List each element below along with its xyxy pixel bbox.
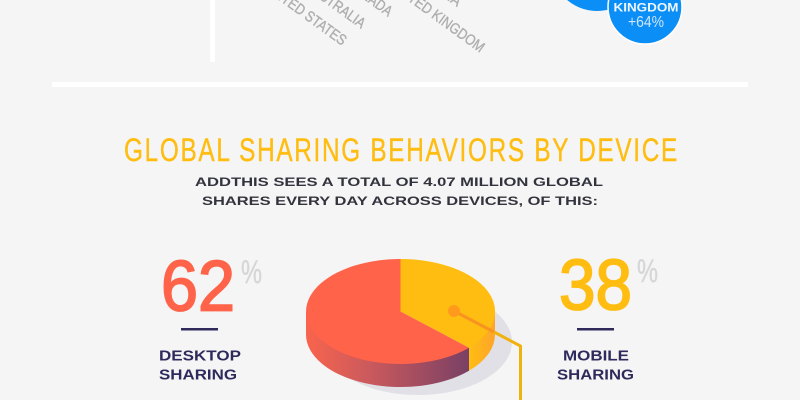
title: GLOBAL SHARING BEHAVIORS BY DEVICE <box>124 133 677 169</box>
bubble value: +64% <box>628 14 664 31</box>
pie top: mobile slice <box>400 259 495 348</box>
desktop label: DESKTOP <box>159 348 241 364</box>
desktop label: SHARING <box>159 368 237 384</box>
panel: mobile sharing <box>557 246 658 384</box>
mobile label <box>557 348 634 384</box>
callout dot <box>448 305 460 317</box>
callout leader line <box>448 305 520 400</box>
blue bubble: United Kingdom <box>608 0 682 44</box>
3D pie chart <box>306 259 520 400</box>
desktop rule <box>181 328 218 330</box>
pie side: mobile <box>469 312 495 371</box>
mobile percentage: 38 <box>559 246 632 326</box>
subtitle: SHARES EVERY DAY ACROSS DEVICES, OF THIS: <box>202 194 598 208</box>
subtitle: ADDTHIS SEES A TOTAL OF 4.07 MILLION GLOBAL <box>195 175 603 189</box>
mobile rule <box>577 328 614 330</box>
pie side: desktop <box>306 312 469 387</box>
desktop percent sign: % <box>241 254 262 290</box>
blue bubble: large <box>551 0 643 11</box>
chart axis line <box>210 0 215 62</box>
pie top: desktop slice <box>306 259 469 364</box>
mobile label: MOBILE <box>563 348 629 364</box>
rotated country labels <box>260 0 488 56</box>
bubble label: country: KINGDOM <box>614 0 678 14</box>
panel: desktop sharing <box>159 248 262 384</box>
subtitle <box>195 175 603 208</box>
pie shadow <box>324 289 512 395</box>
section divider <box>52 82 748 87</box>
mobile label: SHARING <box>557 368 634 384</box>
desktop label <box>159 348 241 384</box>
desktop percentage: 62 <box>161 248 235 326</box>
mobile percent sign: % <box>637 253 658 289</box>
